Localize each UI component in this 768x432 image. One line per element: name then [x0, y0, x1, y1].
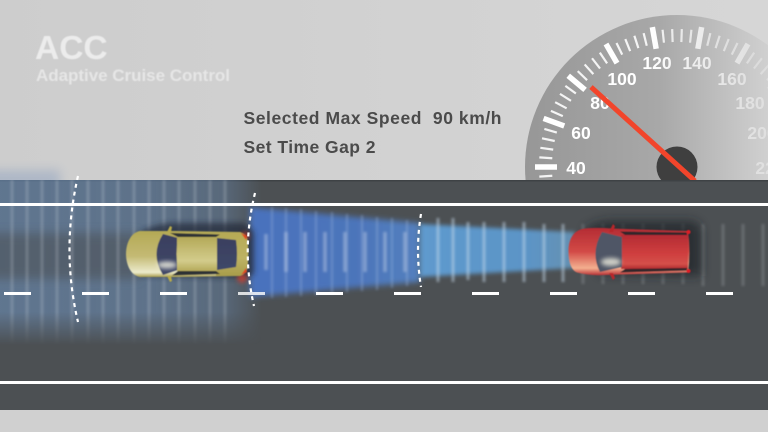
windshield: [595, 232, 622, 272]
roof: [177, 237, 217, 271]
lead car: red wagon: [568, 221, 701, 280]
gauge major ticks: [535, 27, 768, 167]
roof rails and side windows: [620, 232, 687, 235]
gap boundary: right dashed arc: [418, 214, 421, 287]
status text: set time gap: Set Time Gap 2: [244, 137, 376, 157]
side windows: [170, 233, 220, 237]
gauge hub: [656, 146, 698, 180]
subtitle: Adaptive Cruise Control: Adaptive Cruise Control: [36, 66, 230, 85]
speedometer gauge: [525, 15, 768, 180]
gauge speed numbers: [566, 53, 768, 178]
bottom grey band: [0, 410, 768, 432]
windshield: [156, 234, 178, 275]
gap boundary: left dashed arc: [70, 176, 78, 322]
rear deck: [216, 232, 248, 276]
radar zone behind the car: [0, 180, 254, 341]
status text: selected max speed: Selected Max Speed 90 km/h: [244, 108, 502, 128]
mirrors: [609, 224, 615, 280]
gauge speed numbers: 140: [682, 53, 712, 73]
tail lights: [241, 233, 247, 275]
lower lane edge line: [0, 381, 768, 384]
gauge speed numbers: 40: [566, 158, 586, 178]
gauge speed numbers: 180: [735, 93, 765, 113]
car body: [568, 228, 690, 275]
brake light glow: [237, 232, 249, 283]
rear window: [217, 238, 237, 270]
road surface: [0, 180, 768, 410]
title: ACC: ACC: [35, 30, 108, 67]
upper lane edge line: [0, 203, 768, 206]
roof: [621, 235, 688, 269]
gauge speed numbers: 120: [642, 53, 672, 73]
gauge speed numbers: 160: [717, 69, 747, 89]
gap boundary: middle dashed arc: [248, 193, 255, 306]
radar zone: middle blue gap: [250, 207, 420, 298]
tail lamps: [686, 230, 690, 234]
car shadow: [585, 221, 701, 276]
gauge speed numbers: 80: [590, 93, 610, 113]
gauge needle: [591, 87, 695, 181]
gauge speed numbers: 60: [571, 123, 591, 143]
gauge minor ticks: [539, 29, 768, 177]
mirrors: [167, 226, 172, 282]
radar zone: beam from the lead car: [420, 218, 763, 286]
lane centre dashes: [4, 292, 733, 295]
car body: [126, 231, 248, 277]
car shadow: [140, 223, 254, 278]
gauge speed numbers: 100: [607, 69, 637, 89]
following car: yellow sedan: [126, 223, 254, 283]
